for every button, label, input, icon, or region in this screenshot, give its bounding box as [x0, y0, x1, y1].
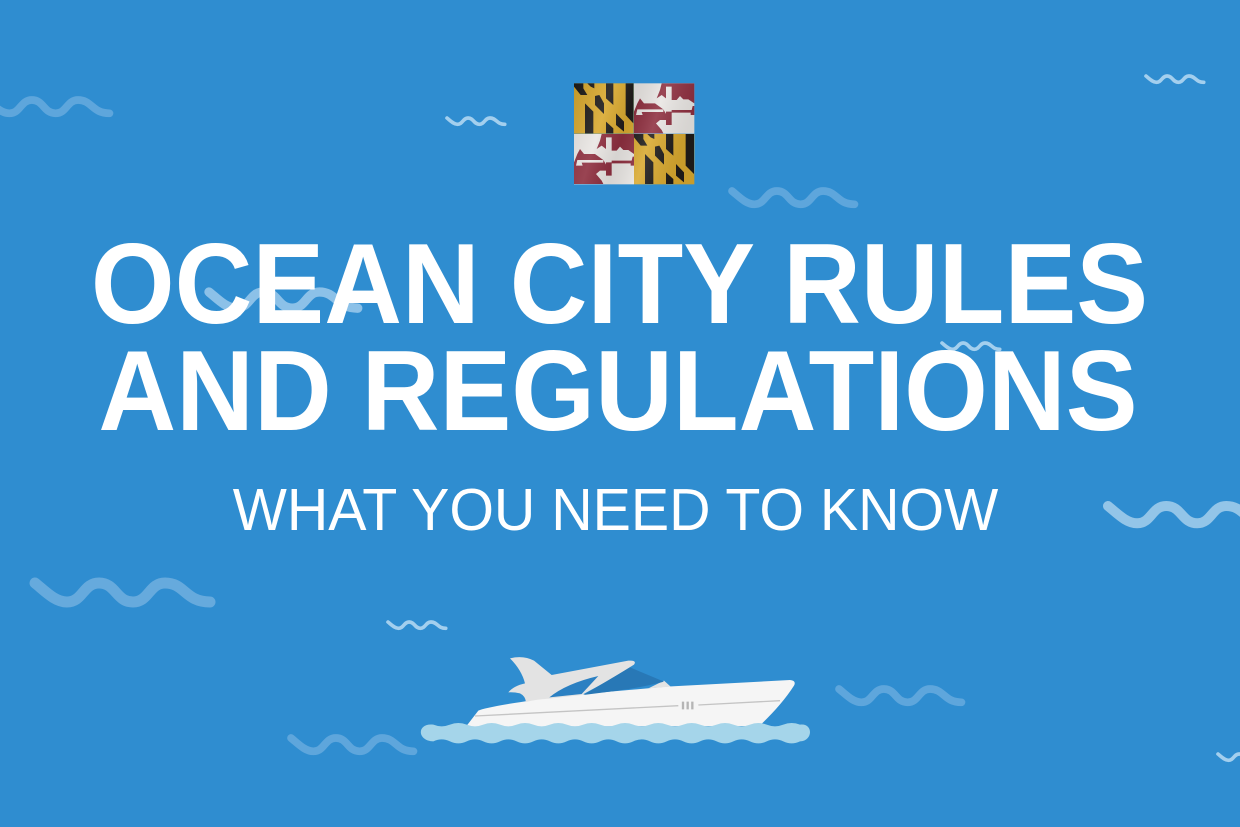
- flag quadrant: gold and black bottom right: [634, 134, 694, 184]
- icon: Maryland flag: [574, 83, 694, 184]
- title line 1: OCEAN CITY RULES: [91, 220, 1148, 348]
- flag sheen: [574, 83, 694, 184]
- hull: [466, 680, 795, 727]
- flag quadrant: red and white top right: [634, 83, 694, 134]
- title line 2: AND REGULATIONS: [98, 327, 1138, 455]
- icon: motor yacht on water: [421, 657, 810, 743]
- flag quadrant: gold and black top left: [574, 83, 634, 134]
- hull stripe: [475, 701, 780, 716]
- rear window: [549, 676, 598, 697]
- superstructure: [508, 657, 635, 702]
- flag quadrant: red and white bottom left: [574, 134, 634, 184]
- title: [91, 220, 1148, 455]
- subtitle: WHAT YOU NEED TO KNOW: [233, 477, 998, 543]
- water: [421, 723, 810, 743]
- windshield: [583, 667, 664, 695]
- hull vents: [683, 702, 692, 709]
